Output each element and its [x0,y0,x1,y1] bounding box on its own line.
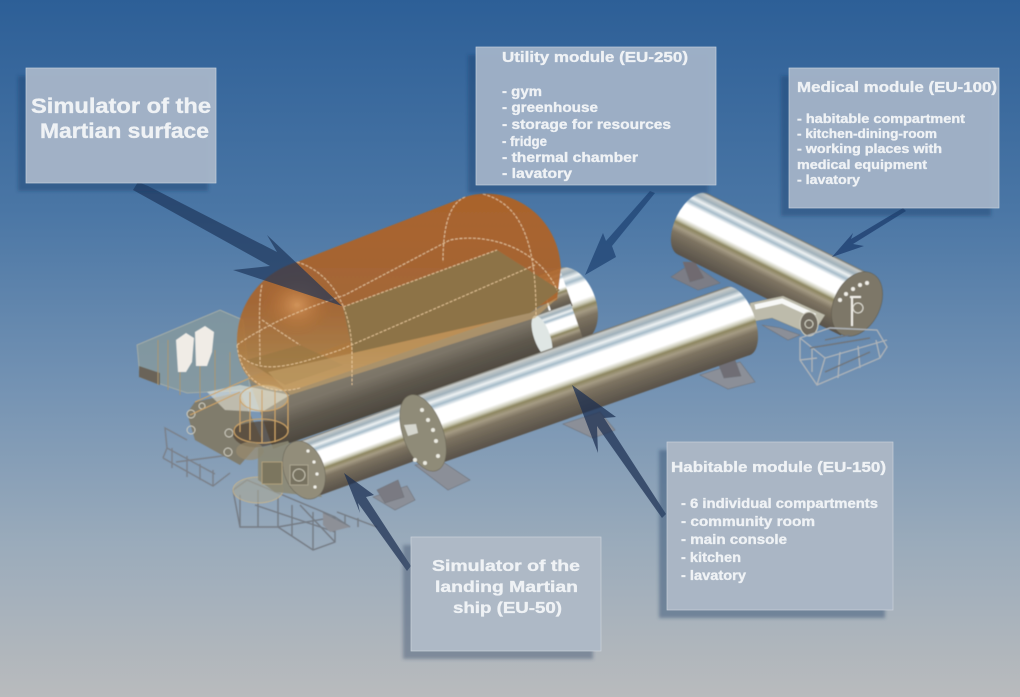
hatch tower [190,378,290,447]
medical module support frame [800,328,887,385]
utility module rear cylinder [248,260,607,449]
panel: Utility module: - gym [502,84,542,99]
panel: Simulator of the landing Martian ship: landing Martian [435,579,578,596]
utility module hatch end [187,392,262,465]
panel: Utility module: - lavatory [502,166,573,181]
panel: Simulator of the Martian surface: Martian surface [40,120,209,143]
panel: Utility module: - storage for resources [502,117,671,132]
panel: Habitable module: - lavatory [681,568,747,583]
panel: Utility module: Utility module (EU-250) [502,50,688,66]
panel: Utility module [468,47,716,193]
arrow to medical module [832,208,906,257]
panel: Utility module: - greenhouse [502,100,599,115]
landing ship cylinder [295,397,441,497]
habitable module cylinder [408,281,766,466]
panel: Simulator of the landing Martian ship: ship (EU-50) [453,600,562,617]
landing ship lower deck [233,442,350,532]
panel: Medical module: - kitchen-dining-room [797,127,937,141]
rear translucent airlock box with astronauts [137,310,250,398]
utility module short shiny segment [527,303,585,360]
panel: Habitable module: - kitchen [681,550,741,565]
panel: Simulator of the landing Martian ship: Simulator of the [432,558,580,575]
panel: Habitable module: Habitable module (EU-150) [671,460,886,476]
landing ship support frame [233,480,377,550]
panel: Medical module: medical equipment [797,158,928,172]
rear frame under utility module [163,428,230,486]
panel: Utility module: - fridge [502,134,547,149]
panel: Simulator of the Martian surface [18,68,216,191]
panel: Medical module: Medical module (EU-100) [797,80,997,96]
module feet [373,262,800,510]
dome: simulator of the Martian surface [237,194,561,395]
panel: Simulator of the Martian surface: Simulator of the [31,95,211,118]
panel: Medical module: - habitable compartment [797,112,966,126]
panel: Medical module: - working places with [797,142,942,156]
medical module cylinder [662,186,871,335]
panel: Simulator of the landing Martian ship [403,537,601,659]
medical module end disc [821,263,893,345]
medical module connector pipe [750,296,825,336]
illustration: simulator complex [137,186,893,550]
flange between modules [391,389,455,477]
panel: Habitable module: - community room [681,514,815,529]
arrow to Martian surface simulator [133,182,342,306]
panel: Habitable module: - main console [681,532,788,547]
arrow to landing ship [344,473,411,571]
arrow to habitable module [572,385,666,518]
panel: Medical module: - lavatory [797,173,860,187]
arrow to utility module [585,191,655,275]
panel: Habitable module [659,442,893,618]
panel: Habitable module: - 6 individual compartments [681,496,878,511]
panel: Utility module: - thermal chamber [502,150,639,165]
landing ship hatch and end disc [258,435,333,505]
panel: Medical module [781,68,999,216]
